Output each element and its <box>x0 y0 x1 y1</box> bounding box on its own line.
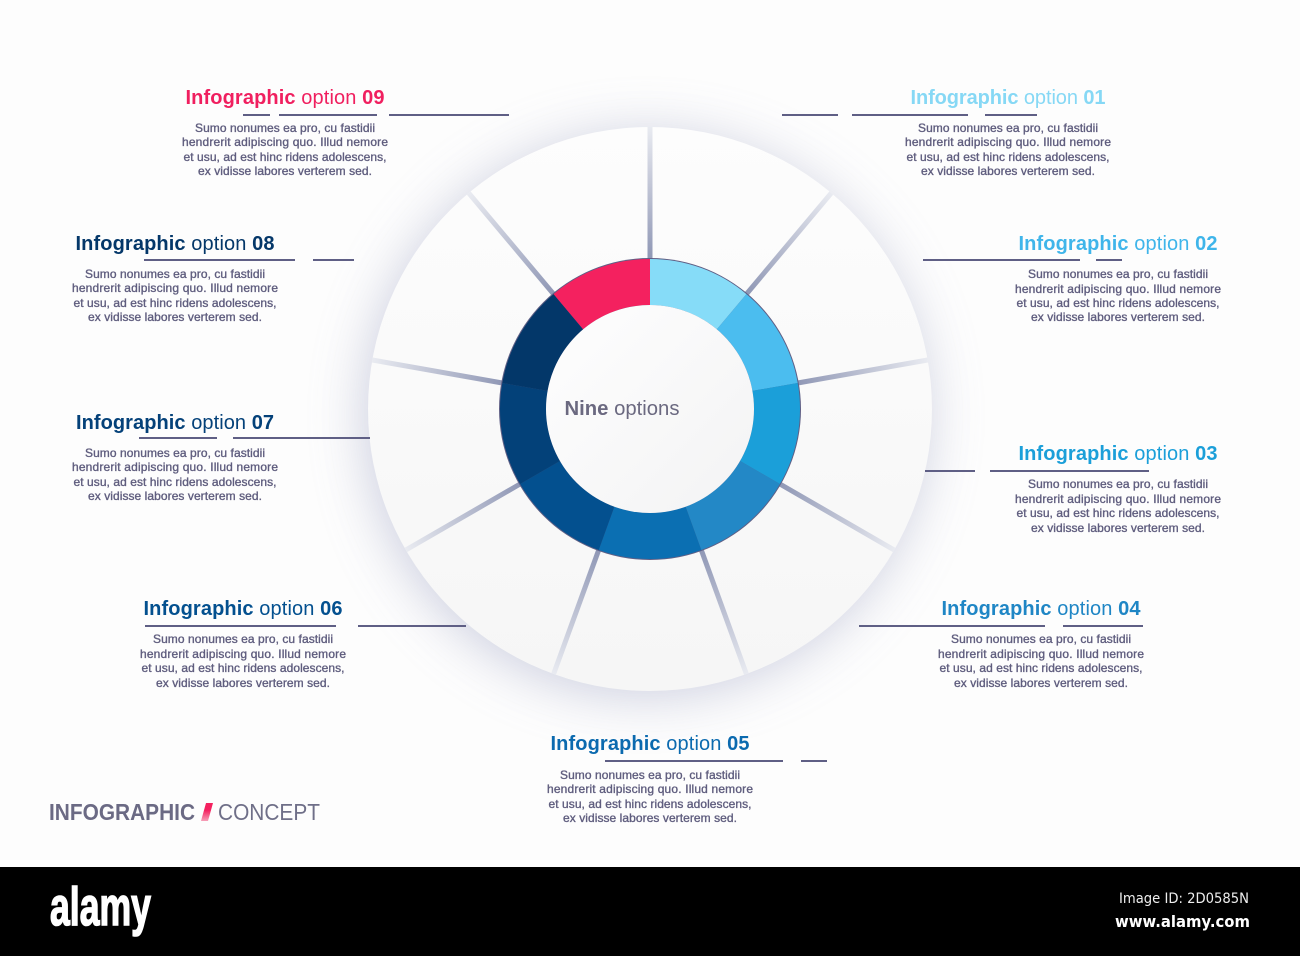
concept heading: INFOGRAPHIC <box>49 799 195 825</box>
centre label: Nine options <box>564 398 680 420</box>
option 07: ex vidisse labores verterem sed. <box>88 489 262 503</box>
option 01: et usu, ad est hinc ridens adolescens, <box>906 150 1110 164</box>
option 06: Sumo nonumes ea pro, cu fastidii <box>153 632 333 646</box>
option 06 <box>140 598 466 690</box>
option 07 <box>72 412 370 503</box>
option 03: Sumo nonumes ea pro, cu fastidii <box>1028 477 1208 491</box>
option 08: Sumo nonumes ea pro, cu fastidii <box>85 267 265 281</box>
option 04: et usu, ad est hinc ridens adolescens, <box>940 661 1142 675</box>
disc shadow <box>364 133 928 697</box>
concept heading <box>49 799 320 825</box>
option 05 <box>547 733 827 825</box>
option 09: Infographic option 09 <box>186 87 384 109</box>
option 07: Infographic option 07 <box>76 412 274 434</box>
option 01: Infographic option 01 <box>910 87 1106 109</box>
option 01: ex vidisse labores verterem sed. <box>921 164 1095 178</box>
option 06: Infographic option 06 <box>144 598 342 620</box>
option 05: et usu, ad est hinc ridens adolescens, <box>548 797 752 811</box>
option 03: hendrerit adipiscing quo. Illud nemore <box>1015 492 1221 506</box>
option 04: hendrerit adipiscing quo. Illud nemore <box>938 647 1144 661</box>
option 09: ex vidisse labores verterem sed. <box>198 164 372 178</box>
footer logo: alamy <box>50 877 151 937</box>
centre hub <box>546 305 754 513</box>
option 04: Sumo nonumes ea pro, cu fastidii <box>951 632 1131 646</box>
option 08 <box>72 233 354 324</box>
option 06: et usu, ad est hinc ridens adolescens, <box>142 661 344 675</box>
concept heading: CONCEPT <box>218 799 320 825</box>
option 08: et usu, ad est hinc ridens adolescens, <box>74 296 276 310</box>
option 03: Infographic option 03 <box>1018 443 1218 465</box>
option 01: Sumo nonumes ea pro, cu fastidii <box>918 121 1098 135</box>
option 05: hendrerit adipiscing quo. Illud nemore <box>547 782 753 796</box>
website: www.alamy.com <box>1115 912 1250 931</box>
option 05: ex vidisse labores verterem sed. <box>563 811 737 825</box>
option 03: ex vidisse labores verterem sed. <box>1031 521 1205 535</box>
option 02 <box>923 233 1221 324</box>
option 02: Infographic option 02 <box>1018 233 1218 255</box>
option 01: hendrerit adipiscing quo. Illud nemore <box>905 135 1111 149</box>
option 08: Infographic option 08 <box>76 233 274 255</box>
footer bar <box>0 867 1300 956</box>
panel: outer disc <box>368 127 932 691</box>
spokes dividing the disc into nine sectors <box>372 127 928 674</box>
option 09: Sumo nonumes ea pro, cu fastidii <box>195 121 375 135</box>
option 05: Infographic option 05 <box>550 733 750 755</box>
option 06: hendrerit adipiscing quo. Illud nemore <box>140 647 346 661</box>
option 07: Sumo nonumes ea pro, cu fastidii <box>85 446 265 460</box>
ring chart: nine segments <box>499 258 801 560</box>
option 09: hendrerit adipiscing quo. Illud nemore <box>182 135 388 149</box>
option 08: hendrerit adipiscing quo. Illud nemore <box>72 281 278 295</box>
option 04: Infographic option 04 <box>942 598 1141 620</box>
option 07: et usu, ad est hinc ridens adolescens, <box>74 475 276 489</box>
option 03 <box>925 443 1221 535</box>
option 08: ex vidisse labores verterem sed. <box>88 310 262 324</box>
option 09: et usu, ad est hinc ridens adolescens, <box>184 150 386 164</box>
option 06: ex vidisse labores verterem sed. <box>156 676 330 690</box>
option 04 <box>859 598 1144 690</box>
option 07: hendrerit adipiscing quo. Illud nemore <box>72 460 278 474</box>
option 02: et usu, ad est hinc ridens adolescens, <box>1016 296 1220 310</box>
option 01 <box>782 87 1111 178</box>
option 02: hendrerit adipiscing quo. Illud nemore <box>1015 282 1221 296</box>
option 05: Sumo nonumes ea pro, cu fastidii <box>560 768 740 782</box>
option 02: Sumo nonumes ea pro, cu fastidii <box>1028 267 1208 281</box>
option 03: et usu, ad est hinc ridens adolescens, <box>1016 506 1220 520</box>
option 02: ex vidisse labores verterem sed. <box>1031 310 1205 324</box>
image id: Image ID: 2D0585N <box>1119 891 1249 907</box>
option 09 <box>182 87 509 178</box>
option 04: ex vidisse labores verterem sed. <box>954 676 1128 690</box>
